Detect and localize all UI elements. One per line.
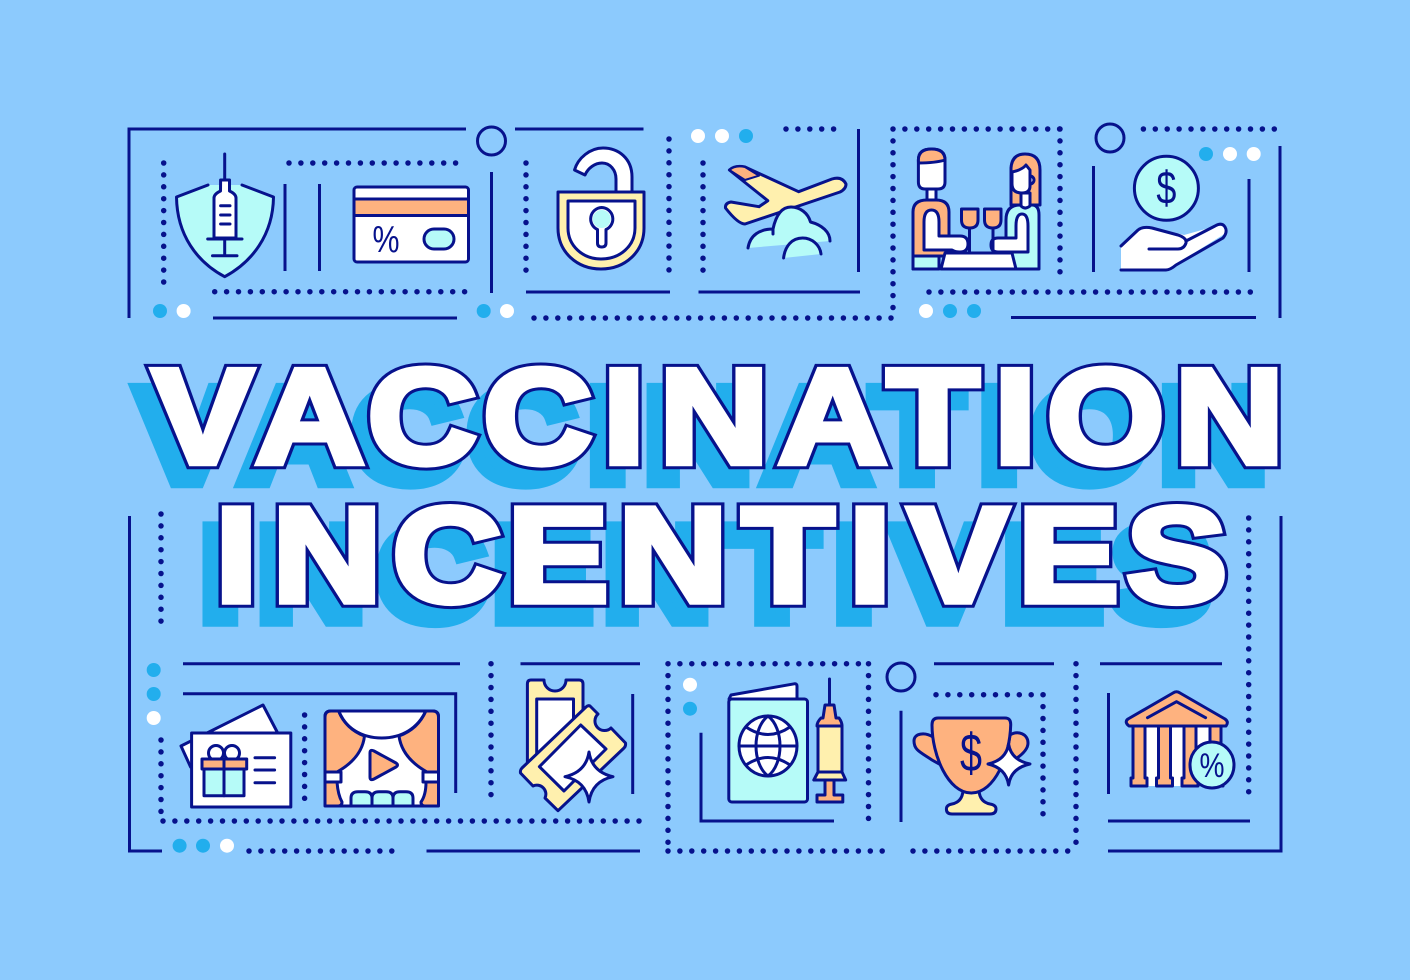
icon: credit card: % xyxy=(372,219,400,261)
icon: shield with syringe xyxy=(176,154,274,277)
title fill xyxy=(152,341,1284,631)
title xyxy=(136,341,1284,650)
title shadow xyxy=(136,360,1268,650)
title shadow: INCENTIVES xyxy=(199,499,1211,650)
icon: coin above hand xyxy=(1121,156,1226,270)
icon: coin above hand: $ xyxy=(1156,162,1176,214)
icon: trophy with dollar: $ xyxy=(960,724,982,784)
icon: airplane over clouds xyxy=(725,166,846,258)
title outline: VACCINATION xyxy=(152,341,1284,492)
icon: bank with percent badge xyxy=(1126,692,1234,788)
title fill: INCENTIVES xyxy=(215,480,1227,631)
icon: credit card xyxy=(354,187,468,262)
top frame lines and dots xyxy=(129,124,1280,318)
icon: gift card xyxy=(181,705,291,807)
icon: trophy with dollar xyxy=(914,718,1030,814)
icon: theatre stage with play xyxy=(325,711,438,806)
icon: couple dining with wine xyxy=(913,149,1040,269)
title outline: INCENTIVES xyxy=(215,480,1227,631)
title fill: VACCINATION xyxy=(152,341,1284,492)
icon: passport and syringe xyxy=(729,679,846,802)
icon: open padlock xyxy=(558,148,644,269)
title outline xyxy=(152,341,1284,631)
bottom frame lines and dots xyxy=(130,514,1281,853)
icon: bank with percent badge: % xyxy=(1200,747,1224,785)
icon: tickets with sparkle xyxy=(520,680,626,811)
title shadow: VACCINATION xyxy=(136,360,1268,511)
